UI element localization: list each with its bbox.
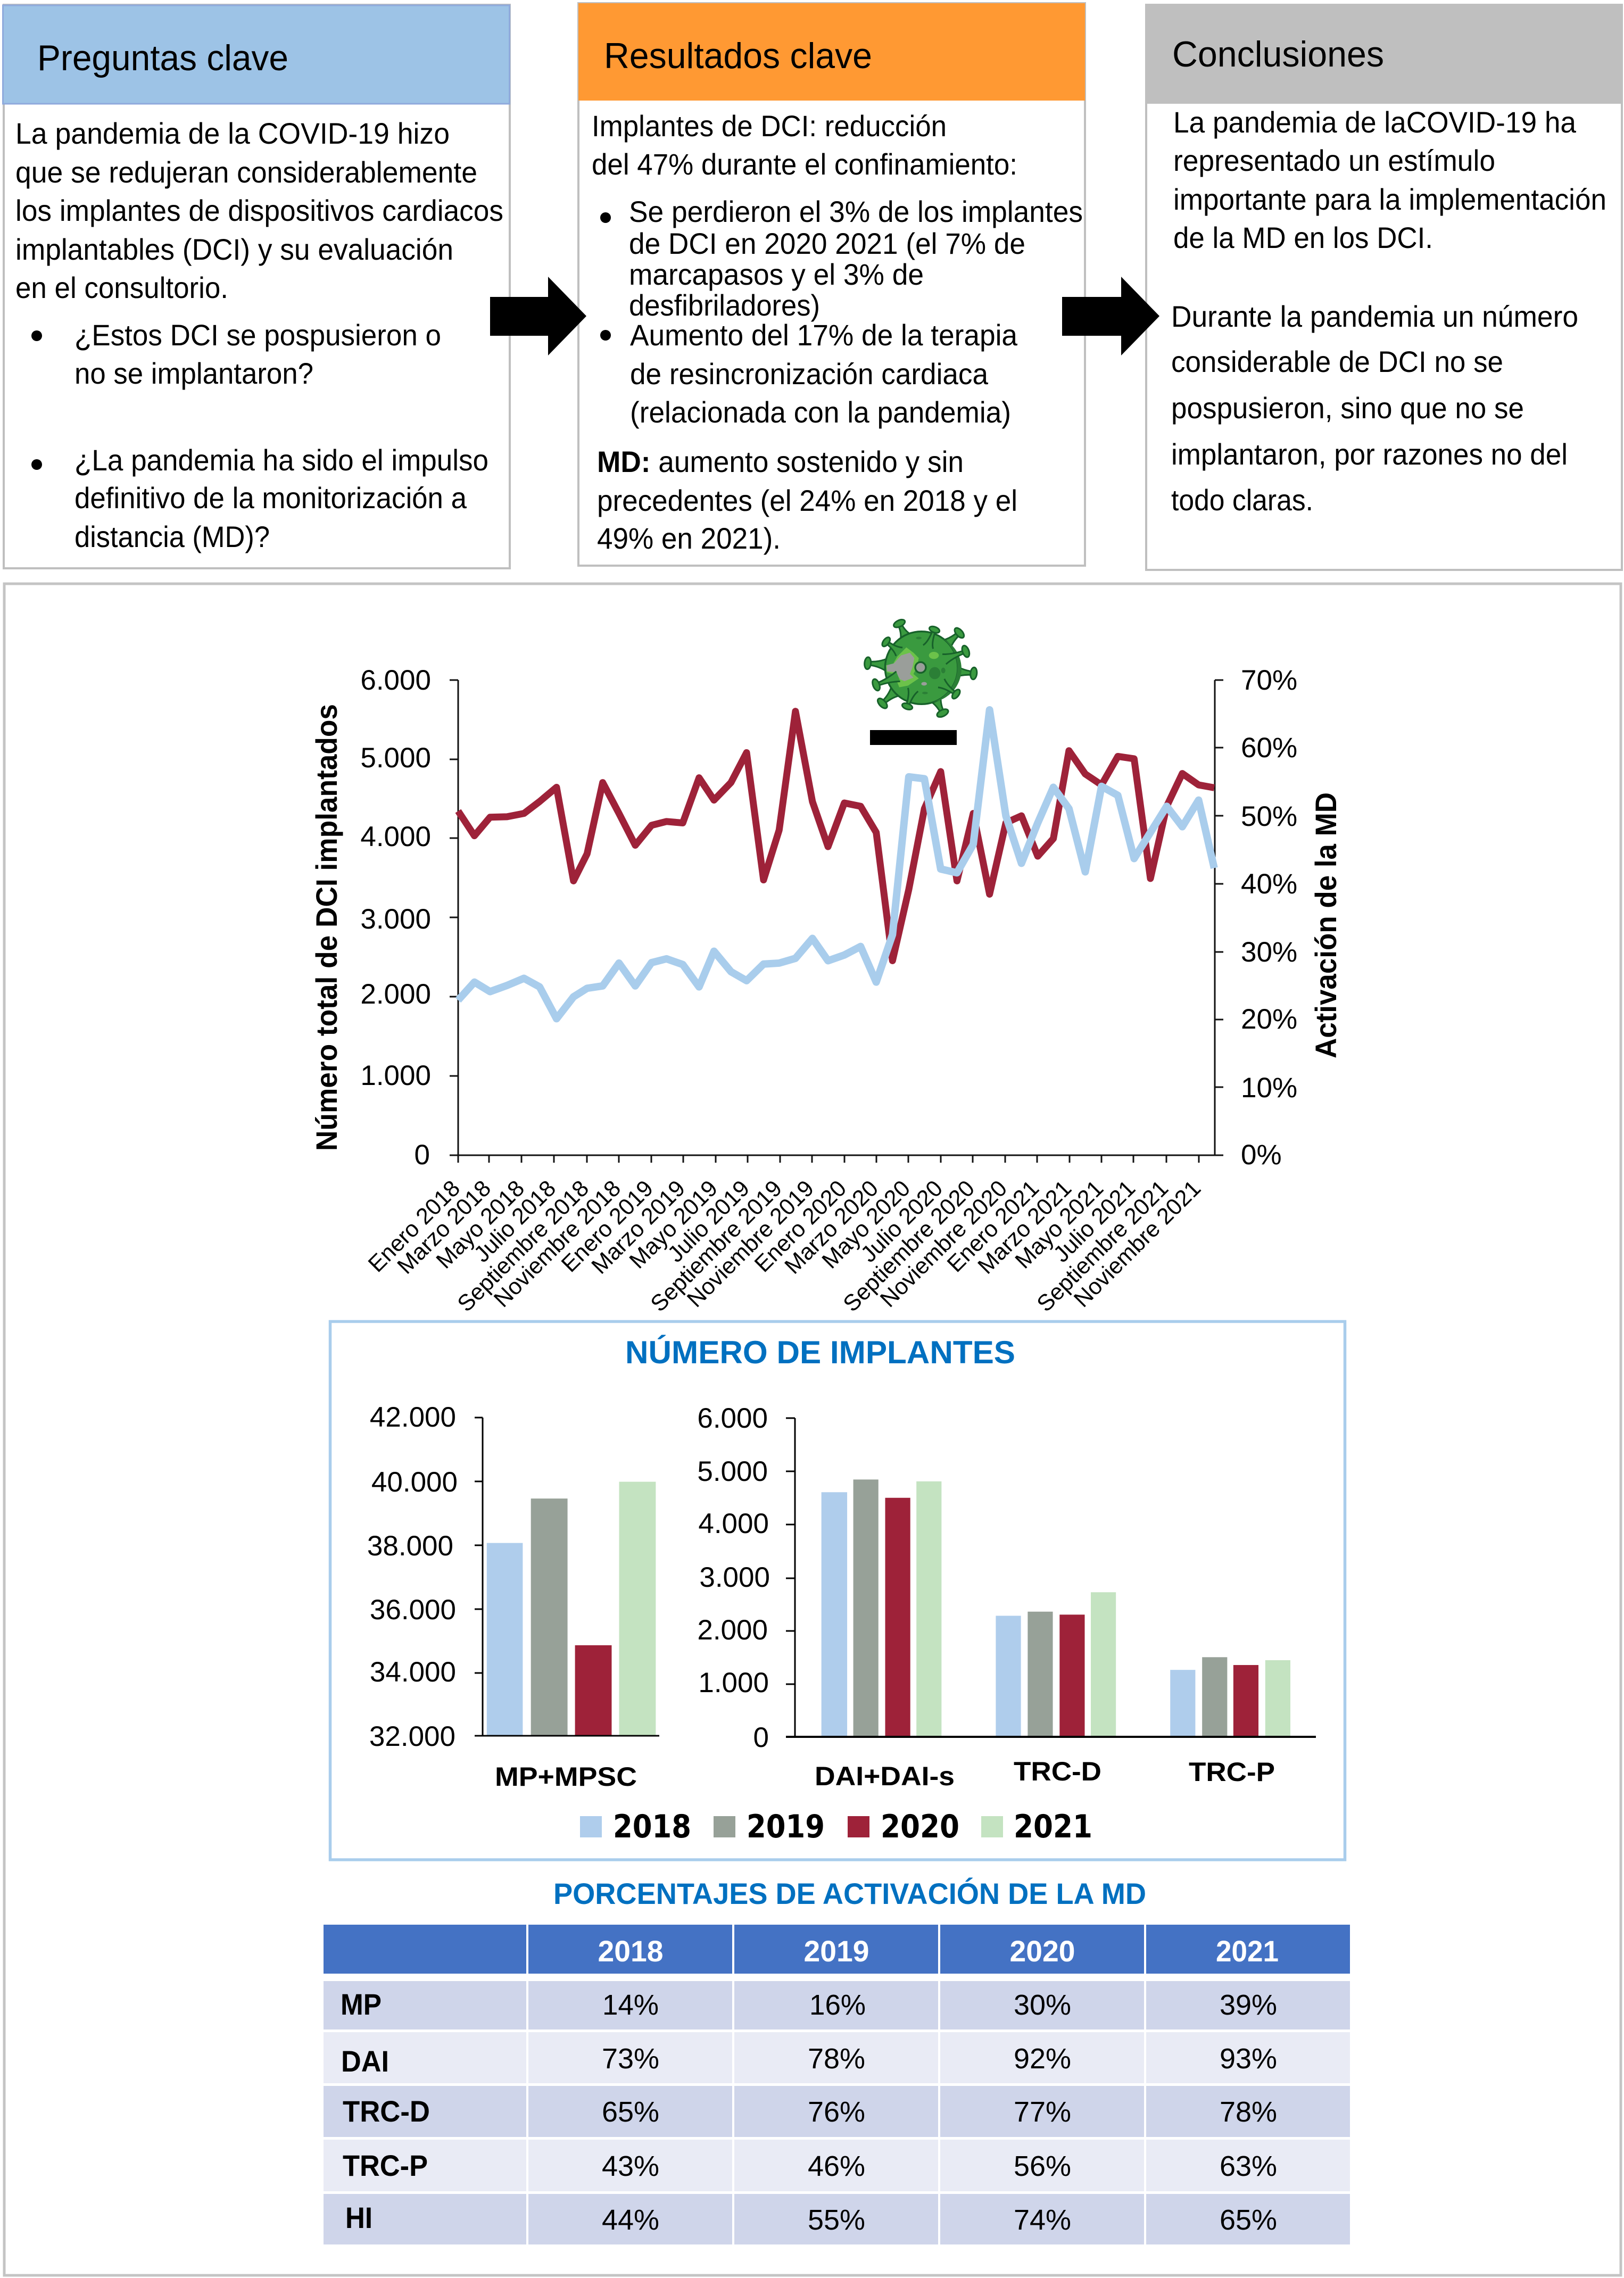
- bullet: implantes perdidos: marcapasos y el 3% de: [629, 258, 924, 291]
- axis labels: [367, 1402, 458, 1752]
- right axis title: Activación de la MD: [1309, 792, 1343, 1058]
- panel: resultados clave: [578, 3, 1085, 566]
- row: DAI: [324, 2032, 1350, 2083]
- x axis labels: Septiembre 2019: [646, 1175, 787, 1317]
- row: HI: 74%: [1014, 2204, 1071, 2236]
- left axis labels: 3.000: [360, 904, 431, 935]
- bullet: pregunta 1: no se implantaron?: [74, 357, 313, 390]
- left axis labels: 2.000: [360, 979, 431, 1010]
- row: TRC-D: 78%: [1220, 2096, 1277, 2128]
- axis labels: 36.000: [370, 1594, 456, 1626]
- left axis labels: [360, 665, 431, 1171]
- bullet: pregunta 1: ¿Estos DCI se pospusieron o: [74, 318, 441, 352]
- x axis labels: Mayo 2019: [625, 1175, 723, 1274]
- bullet: terapia de resincronización: Aumento del 17% de la terapia: [630, 318, 1018, 352]
- left axis labels: 5.000: [360, 742, 431, 774]
- bullet: implantes perdidos: de DCI en 2020 2021 (el 7% de: [629, 227, 1025, 260]
- row: TRC-P: [324, 2140, 1350, 2191]
- axis labels: 4.000: [698, 1508, 769, 1539]
- panel: gráficos y tabla: [4, 584, 1621, 2275]
- marker: periodo de confinamiento: [870, 730, 957, 745]
- text block: introducción: La pandemia de la COVID-19 hizo: [15, 117, 450, 150]
- x axis labels: Septiembre 2021: [1032, 1175, 1173, 1317]
- row: MP: 14%: [602, 1989, 659, 2021]
- bullet: pregunta 2: definitivo de la monitorización a: [74, 481, 467, 515]
- bars: [487, 1482, 656, 1736]
- text block: conclusión 2: considerable de DCI no se: [1171, 345, 1503, 378]
- x axis labels: Noviembre 2021: [1069, 1175, 1206, 1312]
- axis labels: 2.000: [697, 1614, 768, 1646]
- row: HI: 44%: [602, 2204, 659, 2236]
- heading: número de implantes: NÚMERO DE IMPLANTES: [625, 1335, 1015, 1370]
- row: TRC-D: 77%: [1014, 2096, 1071, 2128]
- row: TRC-P: 43%: [602, 2150, 659, 2182]
- row: HI: 55%: [808, 2204, 865, 2236]
- x axis labels: [363, 1175, 1206, 1317]
- row: TRC-P: 46%: [808, 2150, 865, 2182]
- axis labels: 5.000: [697, 1456, 768, 1487]
- x axis labels: Marzo 2021: [973, 1175, 1076, 1279]
- x axis labels: Julio 2018: [469, 1175, 561, 1268]
- heading: porcentajes de activación: PORCENTAJES DE ACTIVACIÓN DE LA MD: [553, 1877, 1146, 1910]
- panel: preguntas clave: [3, 5, 510, 568]
- left axis labels: 1.000: [360, 1060, 431, 1091]
- x axis labels: Mayo 2020: [817, 1175, 915, 1274]
- bullet: terapia de resincronización: [600, 318, 1018, 429]
- text block: conclusión 2: [1171, 300, 1578, 517]
- axis labels: 32.000: [369, 1721, 455, 1752]
- line: total de implantes: [458, 711, 1214, 960]
- panel: número de implantes: [330, 1322, 1345, 1860]
- table header: 2018: [598, 1934, 663, 1968]
- x axis labels: Enero 2018: [363, 1175, 465, 1277]
- row: HI: HI: [345, 2201, 372, 2234]
- text block: conclusión 2: implantaron, por razones no del: [1171, 437, 1568, 471]
- bullet: terapia de resincronización: de resincronización cardiaca: [630, 357, 989, 391]
- text block: introducción: implantables (DCI) y su evaluación: [15, 233, 453, 266]
- category labels: TRC-P: [1189, 1757, 1275, 1787]
- axis labels: 40.000: [371, 1467, 458, 1498]
- bullet: pregunta 1: [31, 318, 441, 390]
- x axis labels: Enero 2020: [750, 1175, 851, 1277]
- text block: monitorización a distancia: precedentes (el 24% en 2018 y el: [597, 484, 1017, 517]
- text block: conclusión 1: importante para la implementación: [1173, 183, 1606, 216]
- x axis labels: Septiembre 2018: [453, 1175, 594, 1317]
- right axis labels: 0%: [1241, 1139, 1282, 1171]
- axis labels: 38.000: [367, 1530, 453, 1562]
- text block: conclusión 2: pospusieron, sino que no se: [1171, 391, 1524, 425]
- left axis labels: 4.000: [360, 821, 431, 852]
- row: DAI: 92%: [1014, 2043, 1071, 2075]
- text block: reducción de implantes: del 47% durante el confinamiento:: [592, 147, 1017, 181]
- arrow: resultados a conclusiones: [1062, 277, 1159, 355]
- axis labels: 0: [753, 1722, 769, 1753]
- axis labels: 1.000: [698, 1667, 769, 1699]
- text block: reducción de implantes: Implantes de DCI: reducción: [592, 109, 947, 143]
- table: activación de la MD: [324, 1925, 1350, 2244]
- row: HI: [324, 2194, 1350, 2244]
- row: DAI: 73%: [602, 2043, 659, 2075]
- x axis labels: Septiembre 2020: [839, 1175, 980, 1317]
- bullet: pregunta 2: ¿La pandemia ha sido el impulso: [74, 443, 488, 477]
- heading: preguntas clave: Preguntas clave: [37, 38, 288, 78]
- text block: monitorización a distancia: MD: aumento sostenido y sin: [597, 445, 964, 478]
- category labels: DAI+DAI-s: [815, 1761, 955, 1791]
- text block: conclusión 1: de la MD en los DCI.: [1173, 221, 1433, 254]
- x axis labels: Mayo 2018: [432, 1175, 529, 1274]
- bullet: pregunta 2: [31, 443, 488, 553]
- legend: años: 2019: [747, 1808, 825, 1845]
- axis labels: 42.000: [370, 1402, 456, 1433]
- heading: resultados clave: Resultados clave: [604, 36, 872, 76]
- x axis labels: Enero 2019: [557, 1175, 658, 1277]
- text block: conclusión 1: [1173, 105, 1606, 254]
- text block: monitorización a distancia: 49% en 2021).: [597, 521, 781, 555]
- axis labels: 3.000: [699, 1562, 770, 1593]
- table header: 2020: [1010, 1934, 1075, 1968]
- left axis labels: 0: [415, 1139, 430, 1171]
- row: MP: 30%: [1014, 1989, 1071, 2021]
- table header: 2021: [1216, 1934, 1279, 1968]
- right axis labels: 10%: [1241, 1072, 1297, 1104]
- heading: conclusiones: [1146, 5, 1622, 104]
- x axis labels: Noviembre 2018: [489, 1175, 626, 1312]
- right axis labels: 40%: [1241, 868, 1297, 900]
- heading: resultados clave: [578, 3, 1085, 101]
- x axis labels: Marzo 2019: [587, 1175, 690, 1279]
- line: activación de la MD: [458, 710, 1214, 1018]
- bar chart: DAI, TRC-D, TRC-P: [697, 1403, 1316, 1791]
- heading: preguntas clave: [3, 5, 510, 104]
- text block: introducción: los implantes de dispositivos cardiacos: [15, 194, 503, 227]
- axis labels: [697, 1403, 770, 1753]
- text block: introducción: en el consultorio.: [15, 271, 228, 304]
- arrow: preguntas a resultados: [490, 277, 586, 355]
- legend: años: [580, 1808, 1092, 1845]
- x axis labels: Julio 2019: [663, 1175, 755, 1268]
- row: TRC-D: TRC-D: [343, 2094, 430, 2128]
- text block: reducción de implantes: [592, 109, 1017, 181]
- text block: conclusión 2: Durante la pandemia un número: [1171, 300, 1578, 333]
- row: HI: 65%: [1220, 2204, 1277, 2236]
- axes: [450, 680, 1223, 1163]
- legend: años: 2020: [881, 1808, 959, 1845]
- x axis labels: Marzo 2020: [780, 1175, 883, 1279]
- axis labels: 34.000: [370, 1656, 456, 1688]
- right axis labels: 30%: [1241, 937, 1297, 968]
- bullet: terapia de resincronización: (relacionada con la pandemia): [630, 395, 1011, 429]
- bullet: implantes perdidos: [600, 195, 1083, 322]
- row: DAI: 78%: [808, 2043, 865, 2075]
- text block: introducción: [15, 117, 503, 304]
- x axis labels: Julio 2021: [1049, 1175, 1140, 1268]
- right axis labels: 20%: [1241, 1004, 1297, 1035]
- panel: conclusiones: [1146, 5, 1622, 570]
- legend: años: 2018: [613, 1808, 691, 1845]
- row: DAI: 93%: [1220, 2043, 1277, 2075]
- bullet: pregunta 2: distancia (MD)?: [74, 520, 270, 553]
- category label: MP+MPSC: [495, 1762, 637, 1792]
- heading: conclusiones: Conclusiones: [1172, 34, 1384, 74]
- text block: conclusión 1: La pandemia de laCOVID-19 ha: [1173, 105, 1577, 139]
- x axis labels: Mayo 2021: [1010, 1175, 1108, 1274]
- bullet: implantes perdidos: Se perdieron el 3% de los implantes: [629, 195, 1083, 228]
- right axis labels: 50%: [1241, 801, 1297, 832]
- right axis labels: 70%: [1241, 665, 1297, 696]
- row: MP: MP: [341, 1987, 382, 2021]
- row: MP: [324, 1981, 1350, 2030]
- table header: [324, 1925, 1350, 1974]
- text block: conclusión 2: todo claras.: [1171, 483, 1313, 517]
- category labels: [815, 1757, 1275, 1791]
- icon: virus: [864, 617, 977, 719]
- row: TRC-D: 65%: [602, 2096, 659, 2128]
- row: MP: 16%: [809, 1989, 866, 2021]
- text block: monitorización a distancia: [597, 445, 1017, 555]
- bullet: implantes perdidos: desfibriladores): [629, 288, 820, 322]
- bars: [822, 1479, 1290, 1737]
- bar chart: MP+MPSC: [367, 1402, 659, 1792]
- category labels: TRC-D: [1014, 1757, 1101, 1786]
- x axis labels: Noviembre 2019: [682, 1175, 819, 1312]
- x axis labels: Noviembre 2020: [875, 1175, 1012, 1312]
- x axis labels: Enero 2021: [942, 1175, 1044, 1277]
- row: TRC-P: 63%: [1220, 2150, 1277, 2182]
- row: TRC-D: 76%: [808, 2096, 865, 2128]
- row: MP: 39%: [1220, 1989, 1277, 2021]
- axis labels: 6.000: [697, 1403, 768, 1434]
- row: TRC-D: [324, 2086, 1350, 2137]
- text block: introducción: que se redujeran considerablemente: [15, 155, 477, 189]
- right axis labels: 60%: [1241, 732, 1297, 764]
- x axis labels: Julio 2020: [856, 1175, 948, 1268]
- line chart: implantes y activación: [310, 617, 1343, 1317]
- row: TRC-P: 56%: [1014, 2150, 1071, 2182]
- table header: 2019: [803, 1934, 869, 1968]
- right axis labels: [1241, 665, 1297, 1171]
- text block: conclusión 1: representado un estímulo: [1173, 144, 1495, 177]
- row: TRC-P: TRC-P: [343, 2149, 428, 2182]
- left axis title: Número total de DCI implantados: [310, 704, 343, 1151]
- legend: años: 2021: [1014, 1808, 1092, 1845]
- x axis labels: Marzo 2018: [393, 1175, 496, 1279]
- left axis labels: 6.000: [360, 665, 431, 696]
- row: DAI: DAI: [341, 2044, 389, 2078]
